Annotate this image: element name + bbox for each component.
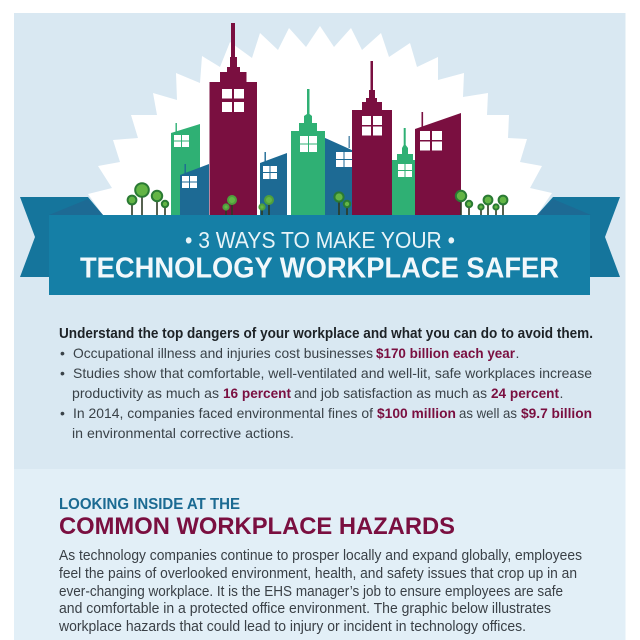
banner right fold [537, 199, 591, 215]
title banner [20, 197, 620, 295]
bullet: environmental fines: • [60, 405, 65, 421]
panel: hazards background [14, 469, 626, 640]
header illustration [88, 23, 552, 215]
bullet: illness cost: $170 billion each year [376, 345, 516, 361]
building: crimson right [415, 112, 461, 215]
bullet: illness cost: Occupational illness and injuries cost businesses [73, 345, 373, 361]
panel: top background [14, 13, 626, 469]
bullet: environmental fines: In 2014, companies faced environmental fines of [73, 405, 373, 421]
section heading: COMMON WORKPLACE HAZARDS [59, 513, 455, 540]
section paragraph: workplace hazards that could lead to injury or incident in technology offices. [58, 619, 526, 635]
starburst behind skyline [88, 26, 552, 215]
bullet: productivity: Studies show that comfortable, well-ventilated and well-lit, safe workplaces increase [73, 365, 592, 381]
bullet: environmental fines: as well as [459, 405, 517, 421]
bullet: illness cost: • [60, 345, 65, 361]
banner left fold [49, 199, 103, 215]
building: blue second [260, 152, 287, 215]
skyline [171, 23, 461, 215]
section paragraph: feel the pains of overlooked environment, health, and safety issues that crop up in an [59, 566, 577, 582]
bullet: environmental fines: $100 million [377, 405, 456, 421]
building: blue right [323, 136, 354, 215]
title line two: TECHNOLOGY WORKPLACE SAFER [80, 252, 559, 284]
intro heading: Understand the top dangers of your workplace and what you can do to avoid them. [59, 326, 593, 342]
bullet: productivity [60, 365, 592, 401]
hazards section [58, 496, 582, 635]
title line one: • 3 WAYS TO MAKE YOUR • [185, 227, 455, 253]
building: blue left [180, 164, 209, 215]
section paragraph: and comfortable in a protected office environment. The graphic below illustrates [59, 601, 551, 617]
bullet: environmental fines: $9.7 billion [521, 405, 592, 421]
bullet: productivity: 16 percent [223, 385, 291, 401]
section kicker: LOOKING INSIDE AT THE [59, 496, 240, 513]
intro text block [59, 326, 593, 441]
section paragraph: As technology companies continue to prosper locally and expand globally, employees [59, 548, 582, 564]
bullet: environmental fines [60, 405, 592, 441]
bullet: productivity: • [60, 365, 65, 381]
bullet: environmental fines: in environmental corrective actions. [72, 425, 294, 441]
section paragraph [58, 548, 582, 635]
banner right tail [537, 197, 620, 277]
bullet: illness cost [60, 345, 519, 361]
building: green centre tower [291, 89, 325, 215]
bullet: productivity: . [560, 385, 563, 401]
building: crimson second tower [352, 61, 392, 215]
building: small green tower [392, 128, 418, 215]
bullet: productivity: 24 percent [491, 385, 559, 401]
trees [128, 183, 507, 215]
bullet: productivity: and job satisfaction as much as [294, 385, 487, 401]
section paragraph: ever-changing workplace. It is the EHS manager’s job to ensure employees are safe [59, 584, 563, 600]
bullet: productivity: productivity as much as [72, 385, 219, 401]
banner body [49, 215, 590, 295]
building: tall crimson tower [210, 23, 257, 215]
bullet: illness cost: . [516, 345, 519, 361]
building: green left [171, 123, 200, 215]
banner left tail [20, 197, 103, 277]
